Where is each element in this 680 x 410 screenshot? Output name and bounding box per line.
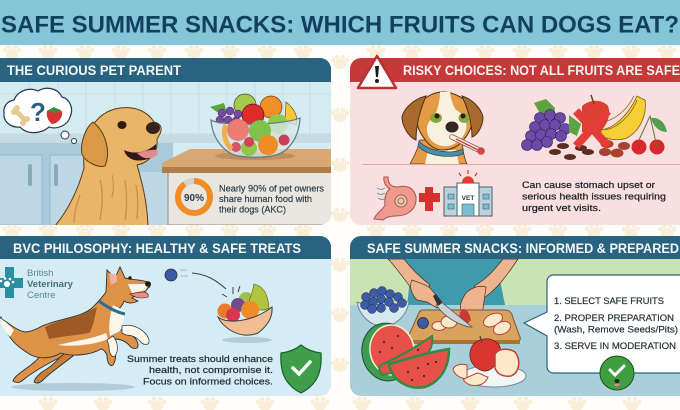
title: SAFE SUMMER SNACKS: WHICH FRUITS CAN DOGS EAT? xyxy=(1,12,679,38)
stat text: their dogs (AKC) xyxy=(219,204,286,214)
panel: risky choices xyxy=(350,82,680,225)
stat text: Nearly 90% of pet owners xyxy=(219,184,325,194)
heading: risky choices xyxy=(350,58,680,82)
icon: bone xyxy=(11,105,30,126)
callout: steps: (Wash, Remove Seeds/Pits) xyxy=(554,324,678,334)
far hind leg xyxy=(34,354,74,384)
panel: safe summer snacks xyxy=(350,259,680,396)
title banner xyxy=(0,0,680,45)
logo: british veterinary centre: Veterinary xyxy=(27,279,74,290)
blueberry with motion trail xyxy=(165,269,240,297)
icon: vet hospital: VET xyxy=(462,195,474,202)
red x xyxy=(576,111,608,146)
jumping corgi xyxy=(0,267,151,383)
heading: bvc philosophy xyxy=(0,236,331,259)
logo: british veterinary centre: British xyxy=(27,268,53,279)
icon: green shield xyxy=(281,345,321,393)
blueberry bowl xyxy=(357,286,409,326)
thought bubble xyxy=(4,88,76,144)
knife xyxy=(433,294,472,327)
sick dog xyxy=(402,92,484,164)
stat text xyxy=(219,184,325,214)
icon: warning triangle xyxy=(358,56,396,88)
stat: 90% donut xyxy=(178,181,210,213)
icon: stomach xyxy=(374,177,416,220)
body, neck and head xyxy=(0,267,150,366)
divider xyxy=(362,164,680,165)
icon: vet hospital xyxy=(444,170,492,216)
philosophy text xyxy=(127,355,273,385)
callout: steps: 2. PROPER PREPARATION xyxy=(554,313,674,323)
panel: bvc philosophy xyxy=(0,236,331,396)
icon: strawberry xyxy=(47,107,62,124)
golden retriever xyxy=(55,108,161,226)
risk text xyxy=(522,180,666,214)
watermelon xyxy=(357,319,449,388)
risk text: Can cause stomach upset or xyxy=(522,180,655,191)
logo: british veterinary centre xyxy=(0,267,74,301)
callout: steps: 1. SELECT SAFE FRUITS xyxy=(554,296,664,306)
cutting board xyxy=(408,294,520,344)
panel: the curious pet parent xyxy=(0,58,333,226)
logo: british veterinary centre: Centre xyxy=(27,290,56,301)
risk text: urgent vet visits. xyxy=(522,203,601,214)
heading: safe summer snacks xyxy=(350,236,680,259)
fruit bowl xyxy=(210,94,300,157)
philosophy text: Summer treats should enhance xyxy=(127,354,273,365)
callout: steps xyxy=(524,275,680,373)
heading: the curious pet parent xyxy=(0,58,331,82)
risky fruit group xyxy=(522,95,667,160)
philosophy text: health, not compromise it. xyxy=(149,365,273,376)
fruit bowl with shadow xyxy=(218,284,272,343)
callout: steps: 3. SERVE IN MODERATION xyxy=(554,341,676,351)
ground shadow xyxy=(11,383,135,391)
apple plate xyxy=(453,336,526,387)
philosophy text: Focus on informed choices. xyxy=(143,376,273,388)
heading: the curious pet parent: THE CURIOUS PET PARENT xyxy=(7,63,182,78)
heading: bvc philosophy: BVC PHILOSOPHY: HEALTHY & SAFE TREATS xyxy=(13,241,301,256)
stat text: share human food with xyxy=(219,194,312,204)
thermometer xyxy=(452,137,484,154)
icon: medical cross xyxy=(419,187,440,211)
icon: check badge with dog face xyxy=(600,356,634,390)
person with apron and hands xyxy=(388,259,518,310)
counter xyxy=(162,149,333,225)
stat: 90% donut: 90% xyxy=(184,193,204,204)
question mark: ? xyxy=(30,97,46,127)
near hind leg xyxy=(12,354,64,383)
risk text: serious health issues requiring xyxy=(522,192,666,202)
